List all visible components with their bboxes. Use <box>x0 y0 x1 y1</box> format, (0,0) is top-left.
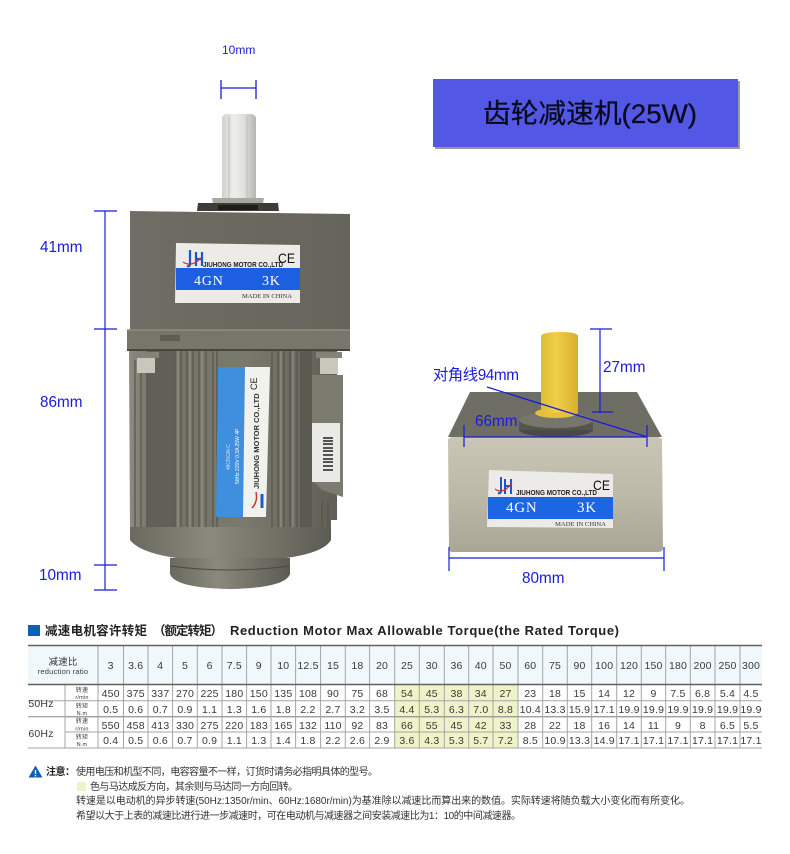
50Hz speed row: 375 <box>127 688 145 700</box>
ratio row: 36 <box>450 660 463 672</box>
60Hz speed row: 183 <box>250 720 268 732</box>
nameplate: 3K <box>577 500 597 516</box>
notes: 色与马达成反方向，其余则与马达同一方向回转。 <box>90 780 298 793</box>
60Hz torque row: 17.1 <box>717 735 738 747</box>
50Hz speed row: 4.5 <box>743 688 759 700</box>
60Hz torque row: 4.3 <box>424 735 439 747</box>
50Hz torque row: 1.1 <box>202 704 217 716</box>
dimensions: gearbox: 27mm <box>603 359 646 376</box>
60Hz torque row: 2.6 <box>350 735 365 747</box>
dimension: motor heights: 10mm <box>39 567 82 584</box>
50Hz torque row: 7.0 <box>473 704 488 716</box>
50Hz torque row: 2.7 <box>325 704 341 716</box>
top nameplate: 4GN <box>194 274 224 289</box>
row labels: 转速 <box>76 686 88 694</box>
50Hz torque row: 2.2 <box>300 704 316 716</box>
ratio row: 15 <box>327 660 339 672</box>
50Hz torque row: 15.9 <box>569 704 590 716</box>
60Hz speed row: 33 <box>499 720 512 732</box>
section heading: Reduction Motor Max Allowable Torque(the Rated Torque) <box>230 623 619 638</box>
50Hz torque row: 0.5 <box>103 704 118 716</box>
section heading: （额定转矩） <box>153 623 223 638</box>
ratio row: 300 <box>742 660 760 672</box>
60Hz speed row: 28 <box>524 720 536 732</box>
50Hz torque row: 19.9 <box>692 704 713 716</box>
50Hz torque row: 1.3 <box>227 704 242 716</box>
ratio row: 120 <box>620 660 638 672</box>
nameplate <box>487 470 613 528</box>
60Hz speed row: 92 <box>351 720 363 732</box>
50Hz speed row: 75 <box>351 688 363 700</box>
50Hz speed row: 108 <box>299 688 317 700</box>
row labels: 转矩 <box>76 733 88 741</box>
50Hz speed row <box>102 688 759 700</box>
50Hz torque row: 0.7 <box>153 704 168 716</box>
50Hz speed row: 18 <box>549 688 561 700</box>
side nameplate: CE <box>249 377 259 390</box>
50Hz torque row: 19.9 <box>740 704 762 716</box>
60Hz torque row: 17.1 <box>643 735 664 747</box>
60Hz torque row <box>103 735 762 747</box>
nameplate: JIUHONG MOTOR CO.,LTD <box>516 488 597 497</box>
50Hz torque row: 19.9 <box>667 704 689 716</box>
60Hz torque row: 0.6 <box>153 735 168 747</box>
ratio row: 90 <box>573 660 586 672</box>
50Hz torque row: 8.8 <box>498 704 513 716</box>
ratio row: 12.5 <box>297 660 319 672</box>
50Hz torque row: 17.1 <box>594 704 615 716</box>
50Hz speed row: 23 <box>524 688 536 700</box>
dimension: motor heights <box>39 211 117 590</box>
60Hz torque row: 10.9 <box>544 735 566 747</box>
50Hz speed row: 337 <box>151 688 169 700</box>
50Hz speed row: 45 <box>426 688 438 700</box>
60Hz torque row: 0.4 <box>103 735 118 747</box>
top nameplate <box>175 243 300 303</box>
header cell: 减速比 <box>48 656 78 668</box>
side nameplate <box>216 367 270 517</box>
ratio row: 4 <box>157 660 163 672</box>
ratio row: 18 <box>351 660 363 672</box>
60Hz torque row: 14.9 <box>594 735 615 747</box>
50Hz torque row <box>103 704 762 716</box>
50Hz speed row: 38 <box>450 688 463 700</box>
50Hz torque row: 13.3 <box>544 704 566 716</box>
50Hz torque row: 3.5 <box>374 704 390 716</box>
dimensions: gearbox: 66mm <box>475 413 518 430</box>
row labels: 转速 <box>76 717 88 725</box>
nameplate: 4GN <box>506 500 538 516</box>
dimension: shaft width 10mm <box>221 43 256 99</box>
50Hz speed row: 270 <box>176 688 194 700</box>
50Hz torque row: 3.2 <box>350 704 365 716</box>
ratio row <box>108 660 760 672</box>
title banner: 齿轮减速机(25W) <box>483 99 697 129</box>
60Hz speed row: 220 <box>225 720 243 732</box>
60Hz torque row: 1.4 <box>276 735 291 747</box>
ratio row: 50 <box>499 660 512 672</box>
row labels: 60Hz <box>28 728 54 740</box>
row labels: 转矩 <box>76 702 88 710</box>
60Hz speed row: 8 <box>700 720 706 732</box>
60Hz torque row: 7.2 <box>498 735 513 747</box>
50Hz torque row: 6.3 <box>449 704 464 716</box>
dimension: motor heights: 41mm <box>40 239 82 256</box>
gearbox housing <box>127 211 350 350</box>
60Hz torque row: 17.1 <box>667 735 689 747</box>
60Hz torque row: 3.6 <box>399 735 415 747</box>
60Hz speed row: 458 <box>127 720 145 732</box>
ratio row: 5 <box>182 660 188 672</box>
50Hz speed row: 27 <box>499 688 512 700</box>
60Hz speed row: 22 <box>549 720 561 732</box>
50Hz speed row: 6.8 <box>695 688 710 700</box>
ratio row: 200 <box>694 660 712 672</box>
60Hz speed row: 550 <box>102 720 120 732</box>
60Hz speed row: 330 <box>176 720 194 732</box>
notes: 转速是以电动机的异步转速(50Hz:1350r/min、60Hz:1680r/min)为基准除以减速比而算出来的数值。实际转速将随负载大小变化而有所变化。 <box>76 794 690 807</box>
ratio row: 150 <box>644 660 663 672</box>
header background <box>28 646 762 684</box>
60Hz speed row: 110 <box>324 720 342 732</box>
60Hz speed row: 5.5 <box>743 720 759 732</box>
ratio row: 3.6 <box>128 660 143 672</box>
ratio row: 250 <box>718 660 737 672</box>
50Hz speed row: 450 <box>102 688 120 700</box>
60Hz speed row: 165 <box>274 720 292 732</box>
nameplate: MADE IN CHINA <box>555 521 606 528</box>
50Hz torque row: 1.8 <box>276 704 291 716</box>
ratio row: 9 <box>256 660 262 672</box>
title banner <box>433 79 740 149</box>
60Hz torque row: 17.1 <box>618 735 640 747</box>
motor body with cooling ribs <box>129 351 337 589</box>
60Hz torque row: 0.9 <box>202 735 217 747</box>
dimension: shaft width 10mm: 10mm <box>222 43 255 57</box>
60Hz torque row: 17.1 <box>692 735 713 747</box>
50Hz speed row: 12 <box>623 688 635 700</box>
row labels: N.m <box>77 711 88 717</box>
50Hz speed row: 68 <box>376 688 388 700</box>
top nameplate: MADE IN CHINA <box>242 293 292 300</box>
nameplate: CE <box>593 477 610 493</box>
60Hz speed row: 16 <box>598 720 610 732</box>
side nameplate: 50Hz 220V 0.3A 25W 4P <box>235 428 241 484</box>
side nameplate: JIUHONG MOTOR CO.,LTD <box>252 393 261 489</box>
ratio row: 60 <box>524 660 536 672</box>
50Hz speed row: 15 <box>573 688 586 700</box>
60Hz torque row: 2.2 <box>325 735 341 747</box>
60Hz speed row: 83 <box>376 720 388 732</box>
50Hz torque row: 0.9 <box>177 704 193 716</box>
logo JH <box>495 477 512 494</box>
60Hz speed row: 6.5 <box>720 720 735 732</box>
ratio row: 10 <box>277 660 289 672</box>
highlighted cells <box>395 685 518 748</box>
ratio row: 6 <box>207 660 213 672</box>
50Hz torque row: 10.4 <box>520 704 541 716</box>
60Hz speed row <box>102 720 759 732</box>
50Hz speed row: 34 <box>475 688 487 700</box>
section heading <box>28 623 619 638</box>
50Hz speed row: 180 <box>225 688 243 700</box>
notes: 希望以大于上表的减速比进行进一步减速时，可在电动机与减速器之间安装减速比为1：10的中间减速器。 <box>76 809 521 822</box>
row labels: r/min <box>75 695 89 701</box>
60Hz torque row: 17.1 <box>740 735 762 747</box>
50Hz torque row: 19.9 <box>643 704 664 716</box>
ratio row: 30 <box>426 660 438 672</box>
50Hz speed row: 135 <box>274 688 292 700</box>
ratio row: 40 <box>475 660 487 672</box>
60Hz torque row: 5.3 <box>449 735 464 747</box>
50Hz speed row: 90 <box>327 688 339 700</box>
60Hz speed row: 275 <box>201 720 219 732</box>
50Hz torque row: 0.6 <box>128 704 143 716</box>
ratio row: 180 <box>669 660 687 672</box>
60Hz speed row: 132 <box>299 720 317 732</box>
ratio row: 7.5 <box>227 660 242 672</box>
60Hz torque row: 1.3 <box>251 735 266 747</box>
60Hz speed row: 11 <box>648 720 659 732</box>
50Hz speed row: 5.4 <box>720 688 735 700</box>
50Hz torque row: 19.9 <box>618 704 640 716</box>
row labels: 50Hz <box>28 698 54 710</box>
50Hz speed row: 14 <box>598 688 610 700</box>
mounting bolts <box>133 352 342 374</box>
top nameplate: CE <box>278 250 295 266</box>
header cell <box>38 656 88 676</box>
60Hz speed row: 55 <box>426 720 438 732</box>
60Hz speed row: 9 <box>675 720 681 732</box>
50Hz speed row: 54 <box>401 688 413 700</box>
60Hz torque row: 0.5 <box>128 735 143 747</box>
50Hz torque row: 19.9 <box>717 704 738 716</box>
50Hz torque row: 1.6 <box>251 704 266 716</box>
output shaft <box>197 114 279 211</box>
header cell: reduction ratio <box>38 667 88 676</box>
50Hz speed row: 225 <box>201 688 219 700</box>
50Hz speed row: 150 <box>250 688 268 700</box>
60Hz speed row: 66 <box>401 720 413 732</box>
top nameplate: 3K <box>262 274 281 289</box>
50Hz torque row: 5.3 <box>424 704 439 716</box>
60Hz speed row: 18 <box>573 720 586 732</box>
60Hz speed row: 14 <box>623 720 635 732</box>
60Hz torque row: 1.8 <box>300 735 316 747</box>
60Hz torque row: 5.7 <box>473 735 488 747</box>
row labels: N.m <box>77 742 88 748</box>
gearbox photo: perspective view <box>448 332 663 552</box>
yellow output shaft <box>519 332 593 437</box>
60Hz speed row: 45 <box>450 720 463 732</box>
section heading: 减速电机容许转矩 <box>45 623 147 638</box>
50Hz torque row: 4.4 <box>399 704 415 716</box>
torque table <box>28 646 762 748</box>
front face <box>448 437 663 552</box>
notes: 使用电压和机型不同，电容容量不一样，订货时请务必指明具体的型号。 <box>76 765 378 778</box>
notes <box>28 765 690 822</box>
dimensions: gearbox <box>433 329 664 587</box>
60Hz torque row: 13.3 <box>569 735 590 747</box>
50Hz speed row: 9 <box>650 688 657 700</box>
icon: warning triangle <box>28 766 42 778</box>
motor photo: front view <box>127 114 350 589</box>
side tab with barcode sticker <box>312 375 343 497</box>
60Hz torque row: 0.7 <box>177 735 193 747</box>
60Hz torque row: 1.1 <box>227 735 242 747</box>
ratio row: 75 <box>549 660 561 672</box>
notes: 注意： <box>46 765 75 778</box>
ratio row: 3 <box>108 660 114 672</box>
row labels <box>28 686 89 748</box>
60Hz speed row: 42 <box>475 720 487 732</box>
side nameplate: 4IK25GN-C <box>226 444 232 470</box>
dimensions: gearbox: 对角线94mm <box>433 367 519 384</box>
50Hz speed row: 7.5 <box>670 688 686 700</box>
ratio row: 100 <box>595 660 613 672</box>
ratio row: 20 <box>376 660 388 672</box>
top face <box>448 392 662 437</box>
top nameplate: JIUHONG MOTOR CO.,LTD <box>203 260 283 269</box>
dimensions: gearbox: 80mm <box>522 570 564 587</box>
logo JH <box>183 250 202 266</box>
dimension: motor heights: 86mm <box>40 394 82 411</box>
legend swatch <box>77 782 86 791</box>
row labels: r/min <box>75 726 89 732</box>
60Hz torque row: 8.5 <box>523 735 538 747</box>
ratio row: 25 <box>401 660 413 672</box>
60Hz torque row: 2.9 <box>374 735 390 747</box>
60Hz speed row: 413 <box>151 720 169 732</box>
